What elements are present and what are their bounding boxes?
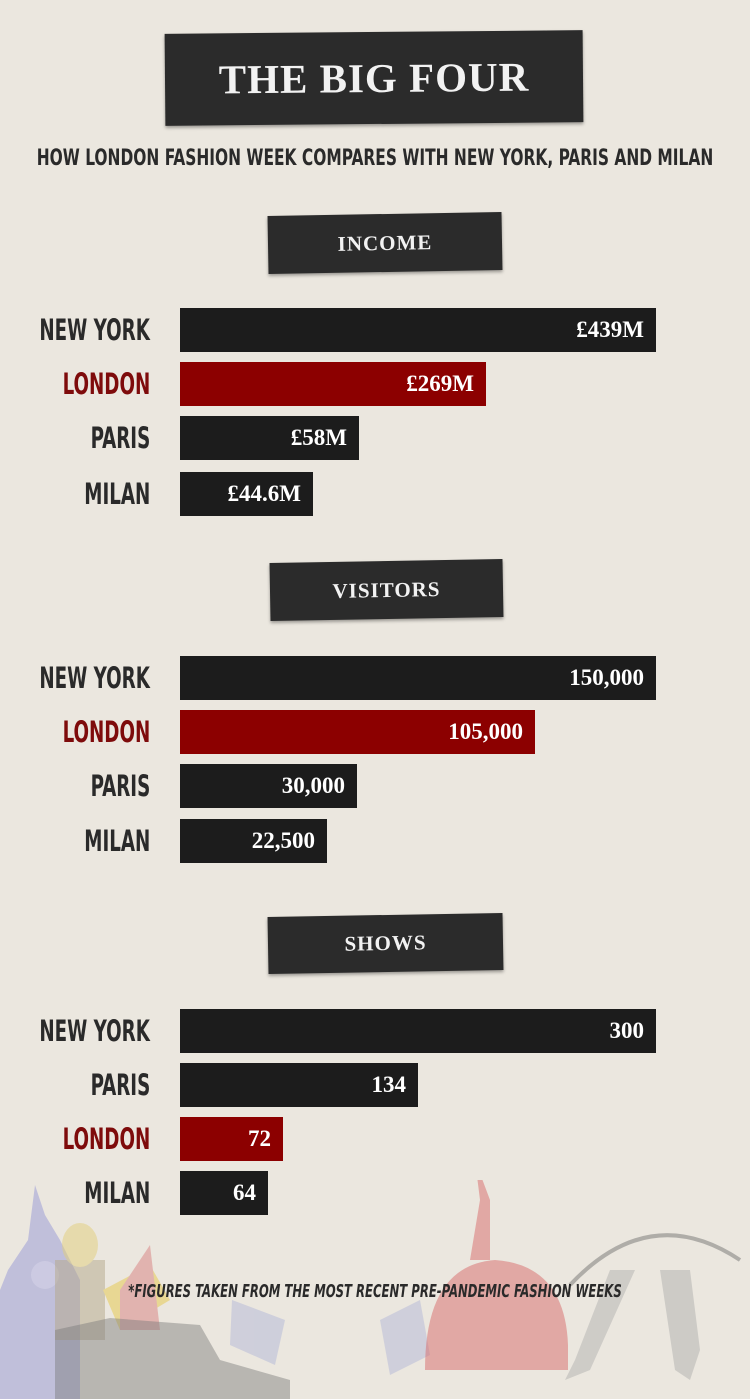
heading: shows xyxy=(268,913,503,974)
chart: shows xyxy=(39,1009,656,1215)
chart: income: £44.6M xyxy=(228,481,301,506)
chart: visitors: 105,000 xyxy=(448,719,523,744)
chart: shows: 134 xyxy=(372,1072,406,1097)
chart: shows: 300 xyxy=(610,1018,644,1043)
illustrations: London landmarks xyxy=(0,1180,741,1399)
chart: income: PARIS xyxy=(90,421,150,455)
heading: visitors: VISITORS xyxy=(332,577,441,602)
chart: income xyxy=(39,308,656,516)
icon: legs xyxy=(565,1270,700,1380)
chart: income: £269M xyxy=(406,371,474,396)
chart: visitors: NEW YORK xyxy=(39,661,150,695)
heading: visitors xyxy=(270,559,503,621)
chart: visitors: PARIS xyxy=(90,769,150,803)
icon: flags xyxy=(230,1300,430,1375)
icon: taxi xyxy=(55,1318,290,1399)
chart: visitors xyxy=(39,656,656,863)
chart: visitors: LONDON xyxy=(62,715,150,749)
chart: income: LONDON xyxy=(62,367,150,401)
chart: visitors: MILAN xyxy=(84,824,150,858)
icon: woman xyxy=(55,1223,170,1340)
title: THE BIG FOUR xyxy=(219,54,529,102)
subtitle: HOW LONDON FASHION WEEK COMPARES WITH NEW YORK, PARIS AND MILAN xyxy=(37,146,713,171)
chart: income: MILAN xyxy=(84,477,150,511)
chart: shows: NEW YORK xyxy=(39,1014,150,1048)
chart: shows: 64 xyxy=(233,1180,256,1205)
chart: income: £58M xyxy=(291,425,347,450)
chart: shows: 72 xyxy=(248,1126,271,1151)
footnote: *FIGURES TAKEN FROM THE MOST RECENT PRE-PANDEMIC FASHION WEEKS xyxy=(128,1281,622,1302)
chart: shows: PARIS xyxy=(90,1068,150,1102)
chart: income: £439M xyxy=(576,317,644,342)
chart: shows: MILAN xyxy=(84,1176,150,1210)
heading: income: INCOME xyxy=(337,230,433,255)
chart: shows: LONDON xyxy=(62,1122,150,1156)
icon: big ben xyxy=(0,1185,80,1399)
heading: income xyxy=(268,212,502,274)
title xyxy=(165,30,583,126)
icon: london eye xyxy=(570,1235,740,1285)
chart: visitors: 30,000 xyxy=(282,773,345,798)
chart: income: NEW YORK xyxy=(39,313,150,347)
chart: visitors: 150,000 xyxy=(569,665,644,690)
heading: shows: SHOWS xyxy=(344,930,427,956)
icon: st pauls xyxy=(425,1160,568,1370)
chart: visitors: 22,500 xyxy=(252,828,315,853)
